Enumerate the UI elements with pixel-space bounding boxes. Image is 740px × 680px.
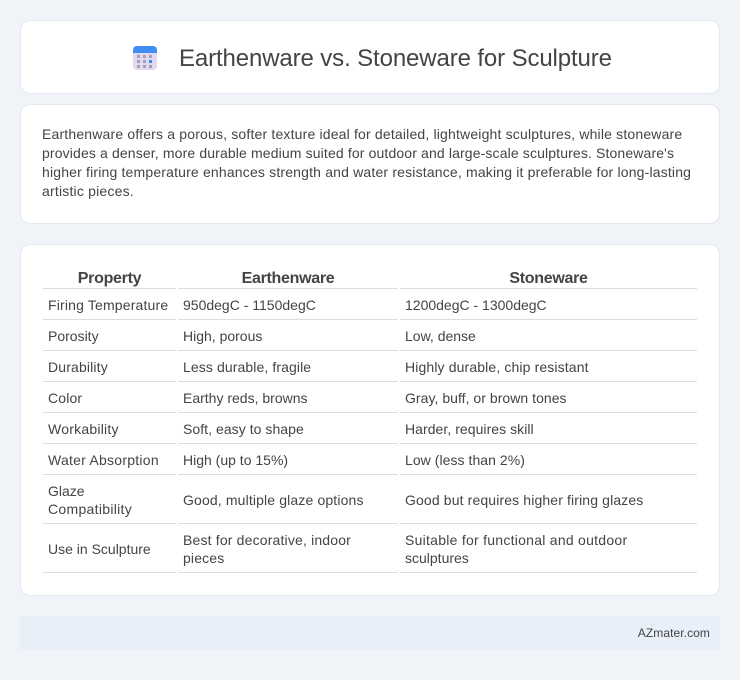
row: glaze compatibility: Good but requires higher firing glazes	[405, 492, 643, 508]
title: Earthenware vs. Stoneware for Sculpture	[179, 45, 612, 72]
row: glaze compatibility: Good, multiple glaze options	[183, 492, 364, 508]
row: use in sculpture	[48, 532, 627, 566]
table header: Property	[78, 270, 141, 287]
row: workability: Soft, easy to shape	[183, 421, 304, 437]
row: durability	[48, 359, 589, 375]
table header: Earthenware	[242, 270, 334, 287]
table header: Stoneware	[509, 270, 588, 287]
comparison table	[43, 270, 697, 573]
panel: comparison table	[20, 244, 720, 596]
row: porosity: Low, dense	[405, 328, 476, 344]
row: glaze compatibility: Glaze	[48, 483, 85, 499]
row: use in sculpture: Best for decorative, indoor	[183, 532, 351, 548]
summary text	[42, 126, 691, 199]
row: durability: Less durable, fragile	[183, 359, 311, 375]
panel: title card	[20, 20, 720, 94]
row: glaze compatibility: Compatibility	[48, 501, 132, 517]
row: workability	[48, 421, 534, 437]
summary text: provides a denser, more durable medium suited for outdoor and large-scale sculptures. Stoneware's	[42, 145, 674, 161]
row: use in sculpture: pieces	[183, 550, 224, 566]
row: porosity: High, porous	[183, 328, 262, 344]
row: color	[48, 390, 567, 406]
row: porosity: Porosity	[48, 328, 99, 344]
summary text: higher firing temperature enhances strength and water resistance, making it preferable for long-lasting	[42, 164, 691, 180]
row: firing temperature: Firing Temperature	[48, 297, 168, 313]
row: color: Gray, buff, or brown tones	[405, 390, 567, 406]
footer bar	[20, 616, 720, 650]
row: porosity	[48, 328, 476, 344]
row: use in sculpture: Use in Sculpture	[48, 541, 151, 557]
summary text: artistic pieces.	[42, 183, 134, 199]
row: firing temperature: 1200degC - 1300degC	[405, 297, 547, 313]
row: durability: Durability	[48, 359, 108, 375]
row: durability: Highly durable, chip resistant	[405, 359, 589, 375]
row: workability: Workability	[48, 421, 119, 437]
row: use in sculpture: sculptures	[405, 550, 469, 566]
row: firing temperature	[48, 297, 547, 313]
row: color: Earthy reds, browns	[183, 390, 308, 406]
table header	[78, 270, 588, 287]
row: use in sculpture: Suitable for functional and outdoor	[405, 532, 627, 548]
row: glaze compatibility	[48, 483, 643, 517]
row: color: Color	[48, 390, 82, 406]
row: water absorption	[48, 452, 525, 468]
icon: calendar	[133, 46, 157, 70]
row: water absorption: High (up to 15%)	[183, 452, 288, 468]
summary text: Earthenware offers a porous, softer texture ideal for detailed, lightweight sculptures, while stoneware	[42, 126, 682, 142]
row: water absorption: Water Absorption	[48, 452, 159, 468]
row: water absorption: Low (less than 2%)	[405, 452, 525, 468]
row: firing temperature: 950degC - 1150degC	[183, 297, 316, 313]
panel: summary	[20, 104, 720, 224]
row: workability: Harder, requires skill	[405, 421, 534, 437]
footer credit: AZmater.com	[638, 626, 710, 640]
